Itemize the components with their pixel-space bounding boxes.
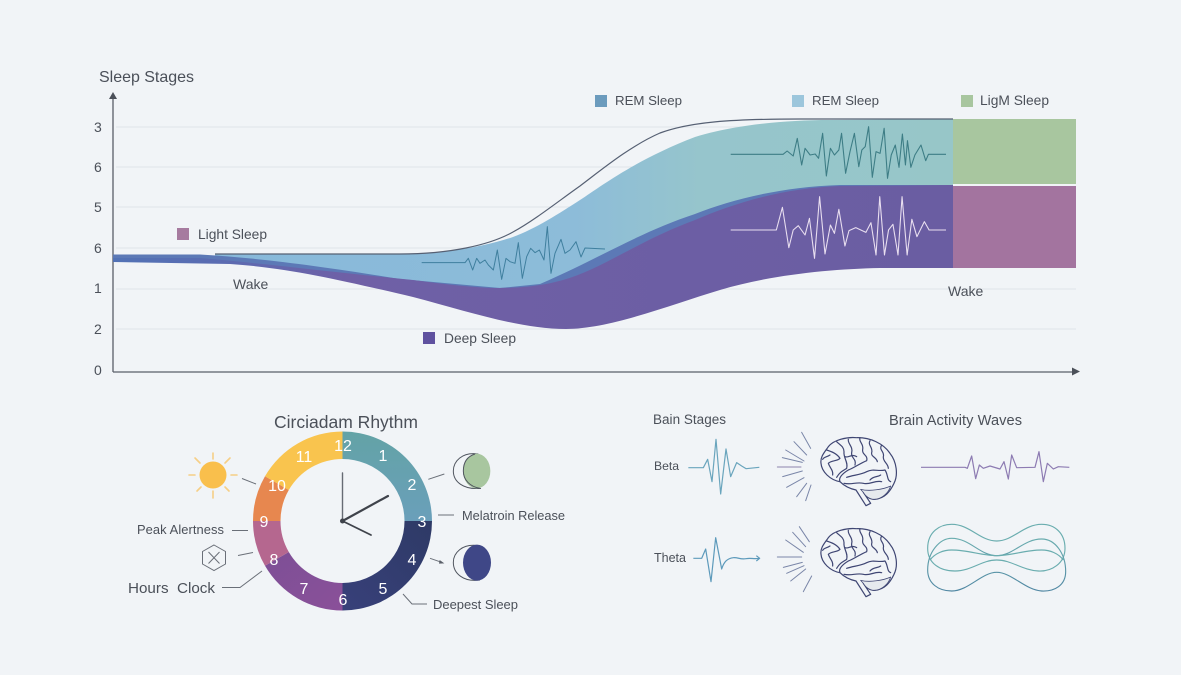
label: deepest sleep: Deepest Sleep: [433, 597, 518, 612]
clock numbers: 5: [379, 581, 388, 598]
legend: REM sleep dark: REM Sleep: [615, 93, 682, 108]
y-axis numbers: 0: [94, 362, 102, 378]
wave: white EEG: [731, 197, 946, 258]
y-axis numbers: 6: [94, 159, 102, 175]
legend: light sleep: Light Sleep: [198, 227, 267, 242]
outline curve above ribbons: [215, 119, 953, 254]
legend: REM sleep light: REM Sleep: [812, 93, 879, 108]
icon: navy moon: [430, 545, 491, 581]
label: theta: Theta: [654, 551, 686, 565]
clock numbers: 10: [268, 478, 286, 495]
wave: small EEG in blue band: [422, 227, 605, 279]
y-axis numbers: 3: [94, 119, 102, 135]
clock numbers: 11: [296, 449, 312, 466]
axes: [109, 92, 1080, 376]
clock hands: [340, 473, 388, 535]
wave: theta with arrow: [693, 538, 760, 582]
label: melatonin release: Melatroin Release: [462, 508, 565, 523]
clock numbers: 7: [300, 581, 309, 598]
wave: teal EEG: [731, 127, 946, 178]
clock heading: Circiadam Rhythm: [274, 412, 418, 432]
rays: top brain: [777, 432, 811, 501]
heading: bain stages: Bain Stages: [653, 412, 726, 427]
clock numbers: 4: [408, 552, 417, 569]
icon: hexagon: [202, 545, 253, 570]
clock numbers: 1: [379, 448, 388, 465]
y-axis numbers: 2: [94, 321, 102, 337]
block: mauve stage: [953, 186, 1076, 268]
icon: top brain: [821, 437, 896, 506]
y-axis numbers: 1: [94, 280, 102, 296]
grid lines: [116, 127, 1076, 329]
clock numbers: 9: [260, 514, 269, 531]
label: deepest sleep: [403, 594, 518, 612]
block: light green stage: [953, 119, 1076, 184]
ribbon: REM and light sleep band: [215, 119, 953, 300]
panel: brain stages and waves: [653, 412, 1069, 597]
label: wake right: Wake: [948, 283, 983, 299]
chart heading: Sleep Stages: [99, 69, 194, 86]
icon: bottom brain: [821, 528, 896, 597]
chart: sleep stages: [94, 69, 1080, 378]
icon: green moon: [428, 454, 490, 489]
legend: deep sleep: Deep Sleep: [444, 331, 516, 346]
label: wake left: Wake: [233, 276, 268, 292]
wave: beta: [688, 439, 759, 494]
clock numbers: 8: [270, 552, 279, 569]
legend: LigM sleep: LigM Sleep: [980, 93, 1049, 108]
clock numbers: 12: [334, 438, 352, 455]
clock numbers: [260, 438, 427, 609]
clock ring: [253, 432, 432, 610]
wave: purple activity: [921, 452, 1069, 482]
rays: bottom brain: [777, 527, 812, 592]
panel: circadian rhythm clock: [128, 412, 565, 612]
ribbon: blue transition band: [113, 185, 953, 300]
label: hours clock: Hours Clock: [128, 580, 215, 597]
heading: brain activity waves: Brain Activity Waves: [889, 413, 1022, 429]
icon: sun: [189, 453, 256, 498]
label: beta: Beta: [654, 459, 679, 473]
wave: looping theta curves: [928, 524, 1066, 591]
y-axis numbers: 6: [94, 240, 102, 256]
y-axis numbers: [94, 119, 102, 378]
clock numbers: 2: [408, 477, 417, 494]
clock numbers: 3: [418, 514, 427, 531]
y-axis numbers: 5: [94, 199, 102, 215]
ribbon: deep sleep band: [113, 185, 953, 329]
label: peak alertness: Peak Alertness: [137, 522, 224, 537]
label: hours clock: [128, 571, 262, 597]
clock numbers: 6: [339, 592, 348, 609]
